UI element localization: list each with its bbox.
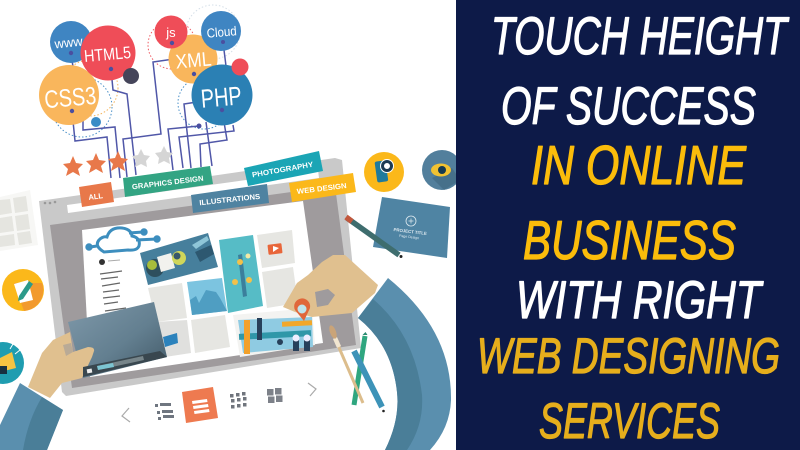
bubble: www: www xyxy=(53,34,84,52)
title line: in online: IN ONLINE xyxy=(531,134,747,196)
video player card xyxy=(68,302,167,378)
tag: graphics design: GRAPHICS DESIGN xyxy=(131,174,204,191)
tag: graphics design xyxy=(123,166,213,197)
tag: photography: PHOTOGRAPHY xyxy=(251,160,314,179)
tag: web design xyxy=(289,173,356,202)
left sleeve xyxy=(0,383,63,450)
bubble: PHP xyxy=(192,64,252,126)
icon: green pencil xyxy=(354,332,368,405)
bubble: js xyxy=(154,16,188,48)
tag: web design: WEB DESIGN xyxy=(296,181,347,196)
bubble: CSS3 xyxy=(39,65,99,125)
icon: mobile settings xyxy=(364,152,404,192)
dotted orbit rings xyxy=(52,5,240,137)
left hand xyxy=(28,332,94,398)
nav: next arrow xyxy=(308,383,316,396)
bubble: HTML5: HTML5 xyxy=(83,43,132,66)
bubble: js: js xyxy=(165,25,176,40)
nav: previous arrow xyxy=(122,408,130,422)
bubble: XML: XML xyxy=(175,48,212,74)
left illustration xyxy=(0,5,462,450)
image: infographic card xyxy=(140,233,218,285)
browser window xyxy=(39,158,361,396)
bubble: www xyxy=(50,21,92,63)
nav: nine grid icon xyxy=(230,392,246,408)
icon: grid panel xyxy=(0,190,38,251)
nav: list icon xyxy=(155,403,174,420)
dot: red xyxy=(232,58,248,76)
bubble: Cloud xyxy=(201,11,241,51)
card: project title: Page Design xyxy=(399,234,419,240)
video controls xyxy=(83,351,167,377)
text lines xyxy=(99,259,126,316)
right hand xyxy=(283,255,378,317)
tag: illustrations xyxy=(191,184,269,213)
nav: active menu button xyxy=(182,387,218,423)
icon: pencil note xyxy=(2,269,44,311)
dot: dark xyxy=(123,68,139,84)
bubble: PHP: PHP xyxy=(199,80,243,114)
rating stars xyxy=(63,146,173,176)
bubble: HTML5 xyxy=(80,26,136,80)
button xyxy=(163,333,178,347)
title line: business: BUSINESS xyxy=(523,209,736,271)
selected image xyxy=(233,308,315,357)
tag: ALL xyxy=(79,182,114,207)
tag: illustrations: ILLUSTRATIONS xyxy=(199,192,261,207)
icon: paint brush xyxy=(328,324,363,403)
right sleeve xyxy=(358,278,451,450)
title line: services: SERVICES xyxy=(539,393,720,449)
tile grid xyxy=(148,283,187,322)
dot: blue xyxy=(91,117,101,127)
icon: megaphone xyxy=(0,342,24,384)
bubble: Cloud: Cloud xyxy=(206,23,237,41)
page content xyxy=(82,201,323,377)
icon: eye xyxy=(422,150,462,190)
bubble: CSS3: CSS3 xyxy=(43,82,97,114)
bubble: XML xyxy=(168,34,218,84)
card: project title: PROJECT TITLE xyxy=(393,227,427,236)
icon: dark pencil xyxy=(346,217,402,258)
connector lines xyxy=(71,42,234,178)
nav: four grid icon xyxy=(267,388,282,403)
connector end dots xyxy=(69,40,225,128)
icon: location pin xyxy=(294,298,310,321)
panel: headline xyxy=(456,0,800,450)
icon: cloud network xyxy=(87,228,159,252)
tag: ALL: ALL xyxy=(88,191,104,202)
icon: play button xyxy=(267,243,283,255)
icon: blue pencil xyxy=(354,351,385,412)
card: project title xyxy=(373,197,450,258)
tag: photography xyxy=(244,151,323,186)
